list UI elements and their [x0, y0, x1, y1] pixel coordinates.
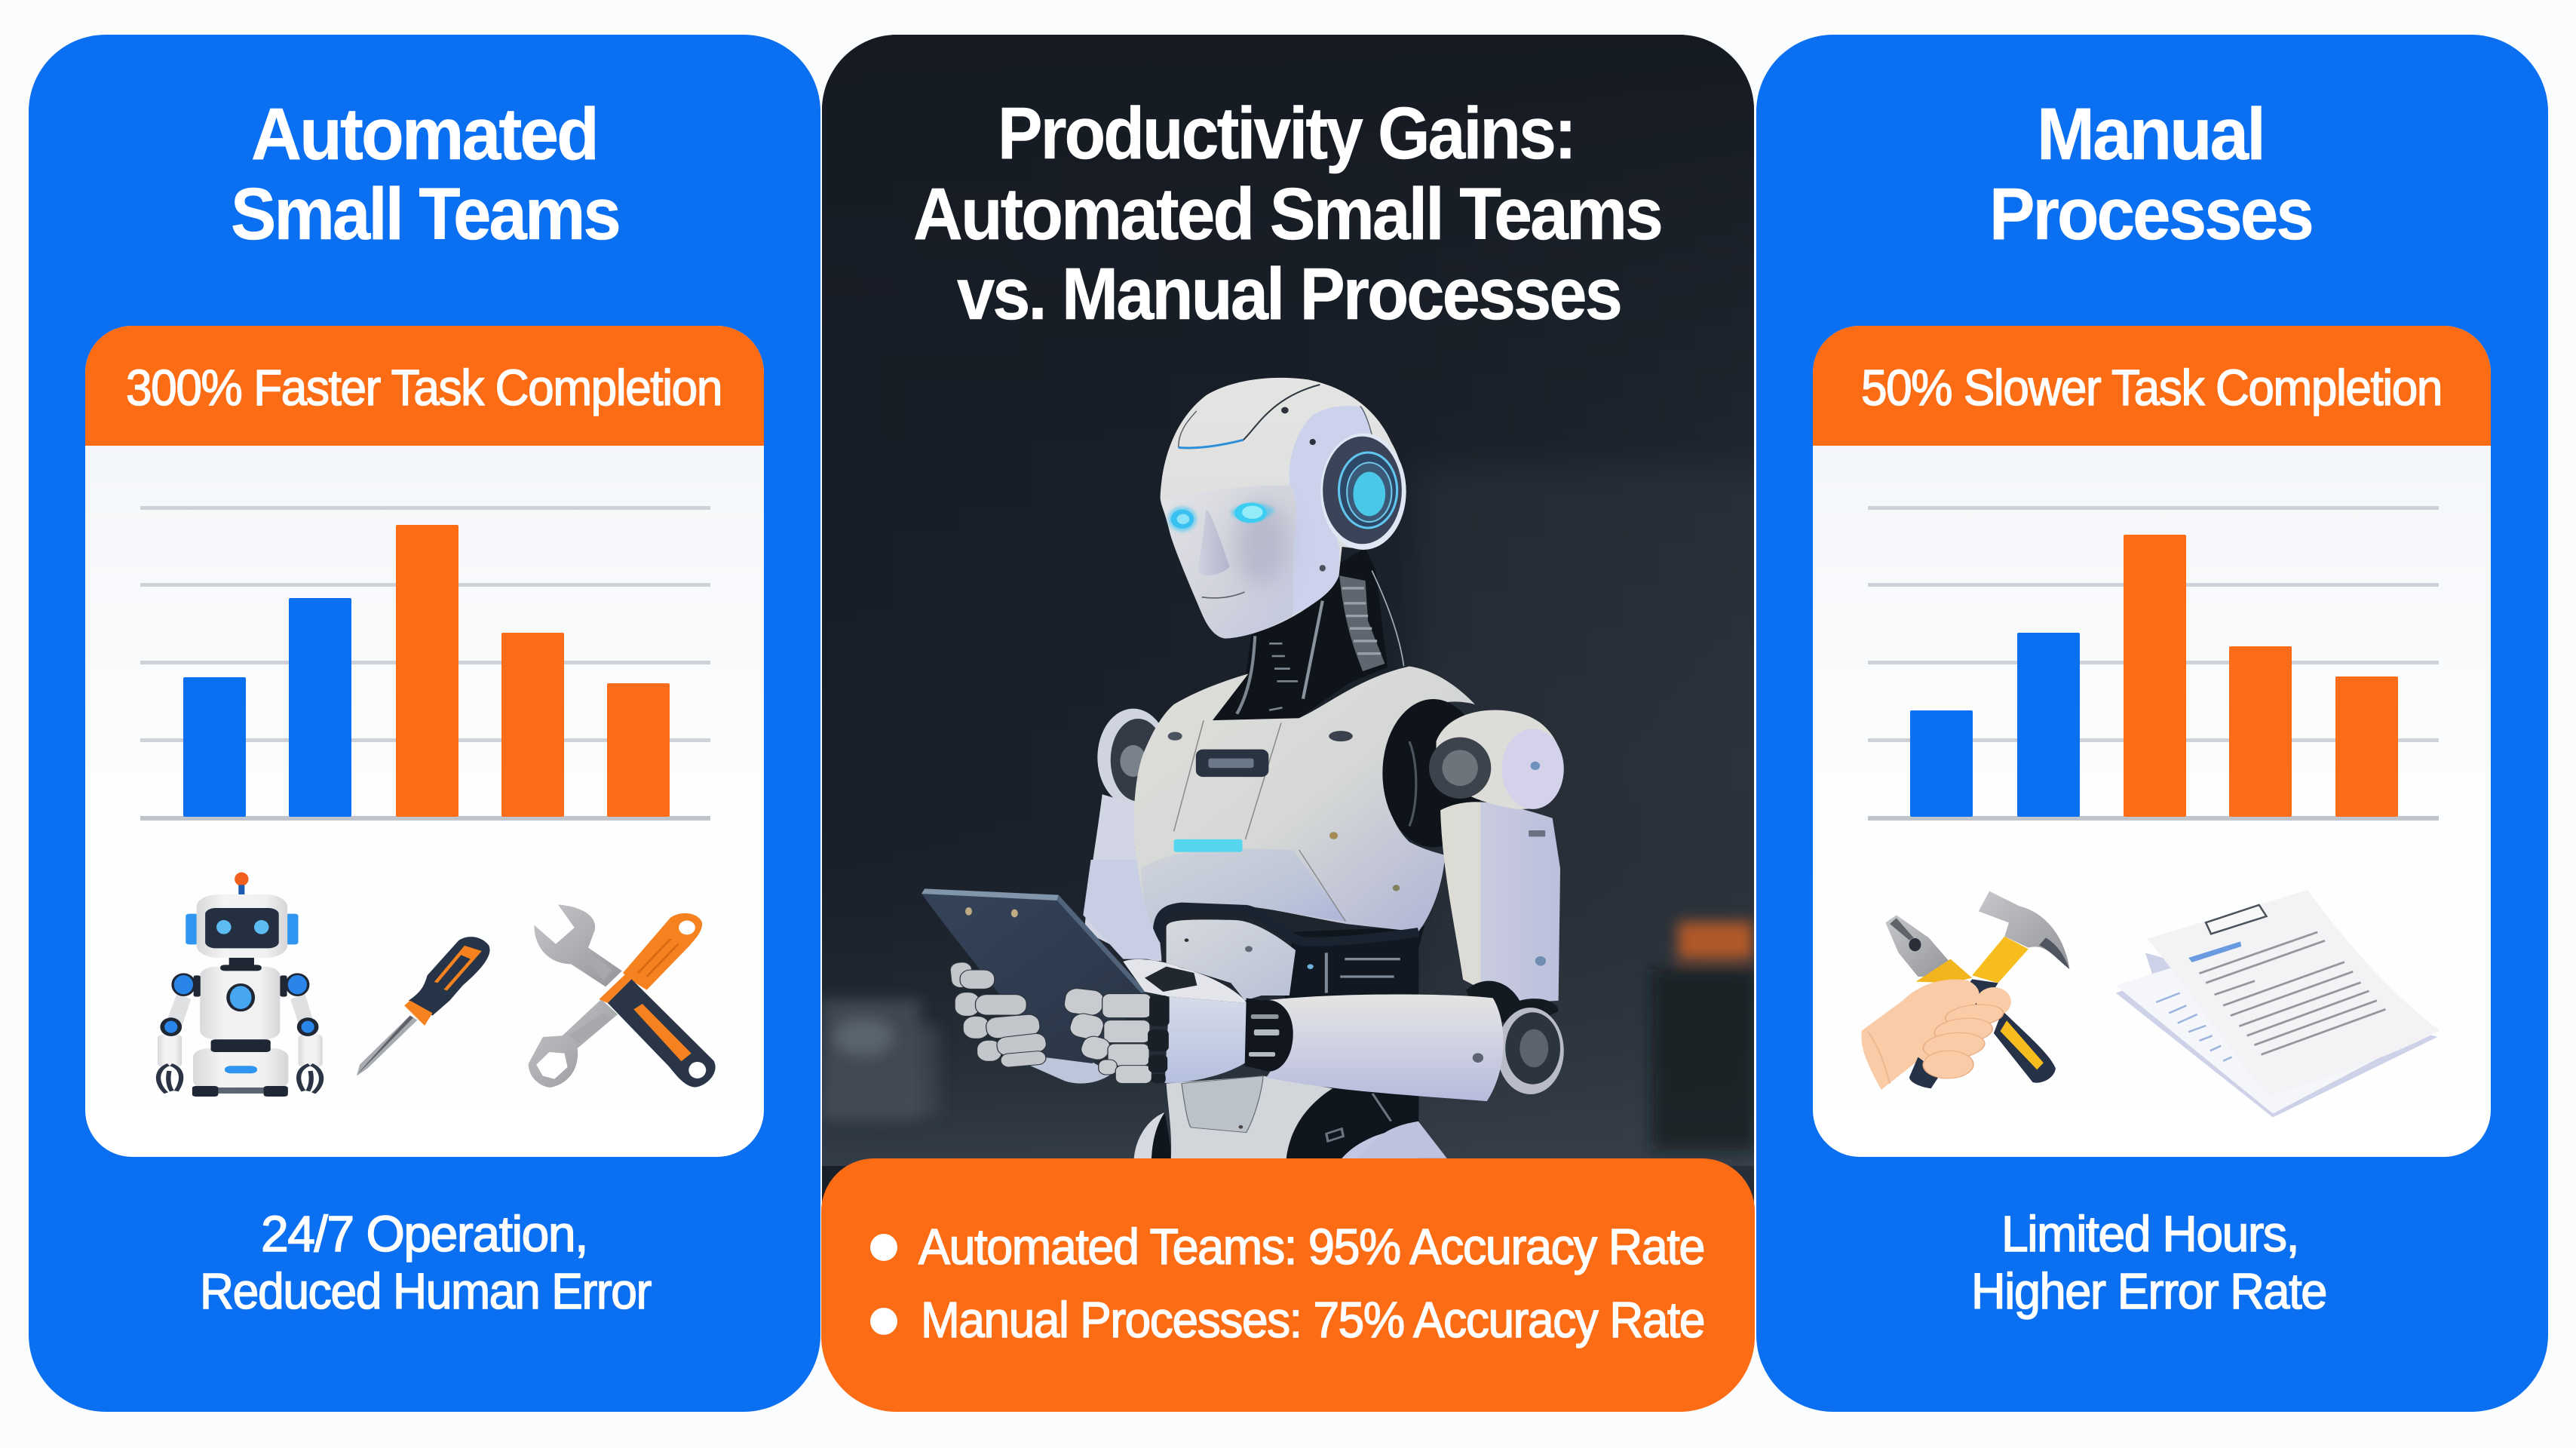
card header band — [85, 326, 764, 446]
hero background — [822, 35, 1795, 1241]
caption: automated benefits: Reduced Human Error — [200, 1263, 652, 1320]
robot side plate — [1290, 406, 1372, 615]
tablet and hands — [922, 860, 1293, 1084]
heading: automated small teams — [231, 93, 619, 255]
right fingers — [1063, 987, 1152, 1084]
left fingers — [949, 962, 1047, 1068]
panel: manual processes — [1756, 35, 2548, 1412]
robot torso and arms — [1084, 667, 1475, 1158]
robot waist mechanics — [1281, 927, 1424, 1158]
left forearm upper — [1083, 860, 1161, 959]
icon: stacked paper documents — [2116, 890, 2440, 1118]
robot face — [1161, 485, 1296, 639]
robot chest — [1134, 667, 1475, 943]
bar chart: automated — [140, 506, 710, 821]
robot left shoulder and arm — [1084, 709, 1169, 961]
icon: crossed wrench and tool — [529, 904, 716, 1088]
card: automated stats — [85, 326, 764, 1157]
heading: main title: vs. Manual Processes — [957, 253, 1621, 335]
header label: 300% Faster Task Completion — [126, 360, 722, 416]
heading: automated small teams: Automated — [251, 93, 597, 175]
robot head shell — [1161, 378, 1405, 639]
left lower hand wrist — [1028, 1057, 1112, 1084]
heading: main title: Productivity Gains: — [998, 92, 1575, 174]
heading: main title — [913, 92, 1661, 335]
tablet — [922, 888, 1146, 1063]
robot neck — [1211, 548, 1404, 722]
caption: manual limitations: Higher Error Rate — [1971, 1263, 2326, 1320]
icon: hand holding pliers and hammer — [1861, 891, 2069, 1090]
heading: manual processes: Processes — [1989, 173, 2312, 255]
robot forearm — [1263, 994, 1504, 1101]
bullet row: automated teams: Automated Teams: 95% Accuracy Rate — [918, 1219, 1704, 1275]
heading: manual processes — [1989, 93, 2312, 255]
panel background — [1756, 35, 2548, 1412]
callout background — [821, 1158, 1755, 1412]
illustration: humanoid robot with tablet — [922, 378, 1564, 1159]
caption: automated benefits: 24/7 Operation, — [261, 1206, 587, 1262]
robot right arm — [1263, 699, 1564, 1158]
heading: main title: Automated Small Teams — [913, 173, 1661, 255]
card: manual stats — [1813, 326, 2491, 1157]
robot ear sensor — [1320, 433, 1406, 550]
icon: screwdriver — [357, 937, 490, 1076]
header label: 50% Slower Task Completion — [1861, 360, 2442, 416]
bullet row: manual processes: Manual Processes: 75% Accuracy Rate — [921, 1292, 1704, 1348]
panel background — [29, 35, 820, 1412]
right knuckles — [1148, 996, 1170, 1083]
card body — [1813, 326, 2491, 1157]
right shoulder and upper arm — [1382, 699, 1564, 1003]
caption: automated benefits — [200, 1206, 652, 1320]
robot neck and head — [1161, 378, 1406, 722]
heading: automated small teams: Small Teams — [231, 173, 619, 255]
callout: accuracy rates — [821, 1158, 1755, 1412]
card body — [85, 326, 764, 1157]
leg lower plate — [1359, 1121, 1447, 1158]
caption: manual limitations — [1971, 1206, 2326, 1320]
panel: center hero — [821, 35, 1795, 1412]
icon: small robot — [158, 873, 323, 1097]
panel: automated small teams — [29, 35, 820, 1412]
robot elbow joint — [1466, 981, 1564, 1094]
caption: manual limitations: Limited Hours, — [2001, 1206, 2298, 1262]
card header band — [1813, 326, 2491, 446]
right hand palm — [1123, 959, 1247, 1083]
heading: manual processes: Manual — [2037, 93, 2264, 175]
forehead detail — [1179, 385, 1372, 572]
robot wrist — [1245, 998, 1293, 1072]
robot abdomen and hips — [1134, 907, 1418, 1159]
bar chart: manual — [1868, 506, 2439, 821]
